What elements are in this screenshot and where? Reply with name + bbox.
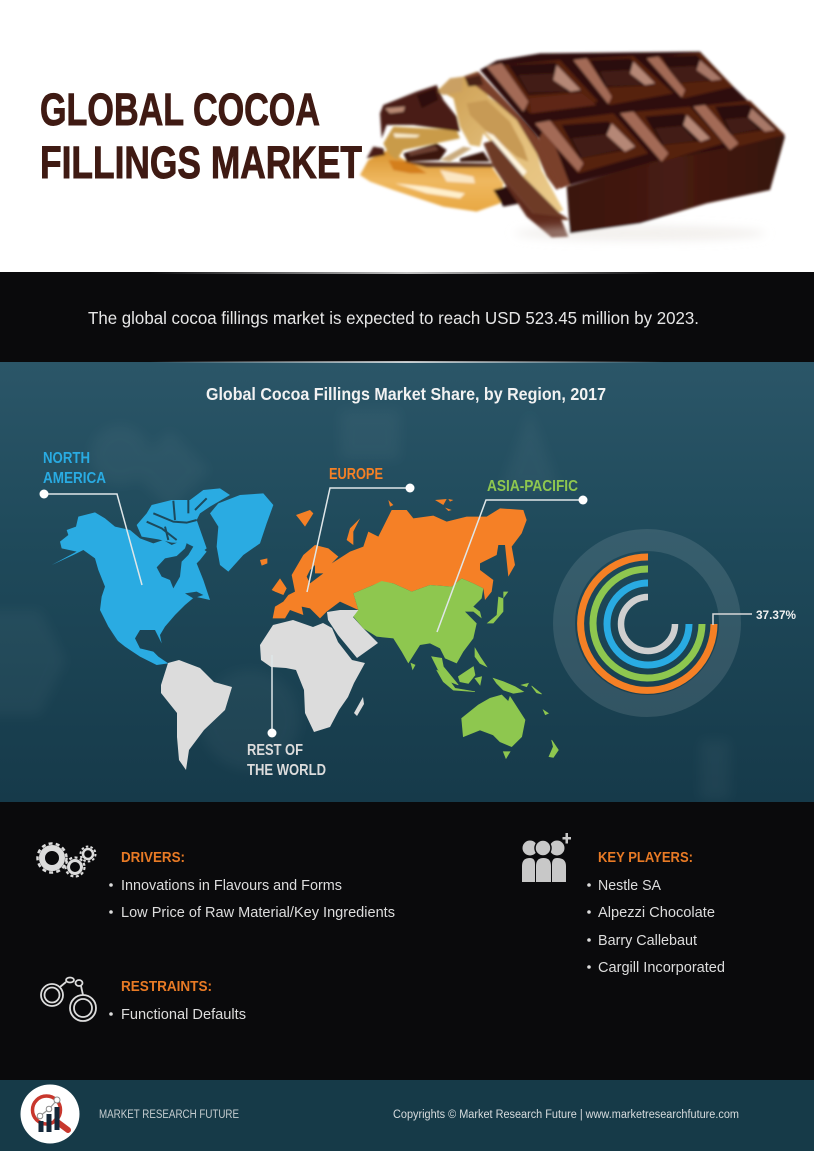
- icon: gears: [38, 844, 96, 876]
- callout: 37.37%: [713, 610, 796, 625]
- icon: people group: [522, 833, 571, 882]
- map: north america: [52, 488, 273, 665]
- icon: handcuffs: [41, 978, 96, 1021]
- summary band: [0, 272, 814, 362]
- callout: asia-pacific: ASIA-PACIFIC: [487, 478, 578, 495]
- key players list: [587, 877, 725, 976]
- brand name: MARKET RESEARCH FUTURE: [99, 1109, 239, 1121]
- callout: europe: EUROPE: [329, 466, 383, 483]
- summary text: The global cocoa fillings market is expected to reach USD 523.45 million by 2023.: [88, 308, 699, 328]
- square 2: [573, 56, 673, 105]
- callout: europe: [307, 466, 414, 592]
- restraints heading: RESTRAINTS:: [121, 978, 212, 995]
- radial bar chart: [564, 540, 796, 706]
- drivers list: Low Price of Raw Material/Key Ingredients: [121, 904, 395, 921]
- callout: north america: AMERICA: [43, 470, 106, 487]
- key players list: Barry Callebaut: [598, 932, 698, 949]
- copyright: Copyrights © Market Research Future | www.marketresearchfuture.com: [393, 1109, 739, 1121]
- map: asia: [353, 578, 508, 663]
- key players list: Nestle SA: [598, 877, 661, 894]
- panel: drivers, restraints and key players: [0, 802, 814, 1080]
- chocolate bar squares: [480, 52, 785, 241]
- broken chocolate and caramel: [360, 72, 570, 237]
- square 5: [620, 107, 723, 162]
- header panel: [0, 0, 814, 272]
- logo: [20, 1084, 80, 1144]
- callout: north america: NORTH: [43, 450, 90, 467]
- title: [40, 84, 362, 188]
- restraints list: Functional Defaults: [121, 1006, 246, 1023]
- callout: rest of the world: REST OF: [247, 742, 303, 759]
- callout: 37.37%: 37.37%: [756, 610, 796, 622]
- square 3: [647, 53, 733, 98]
- key players list: Alpezzi Chocolate: [598, 904, 715, 921]
- drivers list: Innovations in Flavours and Forms: [121, 877, 342, 894]
- map: europe and russia: [260, 499, 527, 618]
- key players heading: KEY PLAYERS:: [598, 849, 693, 866]
- callout: rest of the world: THE WORLD: [247, 762, 326, 779]
- drivers list: [109, 877, 395, 921]
- image: chocolate bar with caramel filling: [360, 52, 785, 241]
- footer: [0, 1080, 814, 1151]
- arctic channels: [147, 498, 207, 540]
- world map: [52, 488, 558, 770]
- square 1: [487, 60, 598, 113]
- square 6: [693, 101, 785, 150]
- drivers heading: DRIVERS:: [121, 849, 185, 866]
- map: southeast asia and oceania: [411, 648, 558, 758]
- callout: north america: [40, 450, 142, 585]
- callout: asia-pacific: [437, 478, 588, 632]
- chart heading: Global Cocoa Fillings Market Share, by Region, 2017: [206, 384, 606, 404]
- panel: regional market share: [0, 361, 814, 802]
- title: GLOBAL COCOA: [40, 84, 320, 135]
- key players list: Cargill Incorporated: [598, 959, 725, 976]
- square 4: [535, 113, 648, 173]
- callout: rest of the world: [247, 655, 326, 779]
- map: rest of the world: [161, 610, 378, 770]
- decorative ghost background icons: [0, 410, 730, 800]
- title: FILLINGS MARKET: [40, 137, 362, 188]
